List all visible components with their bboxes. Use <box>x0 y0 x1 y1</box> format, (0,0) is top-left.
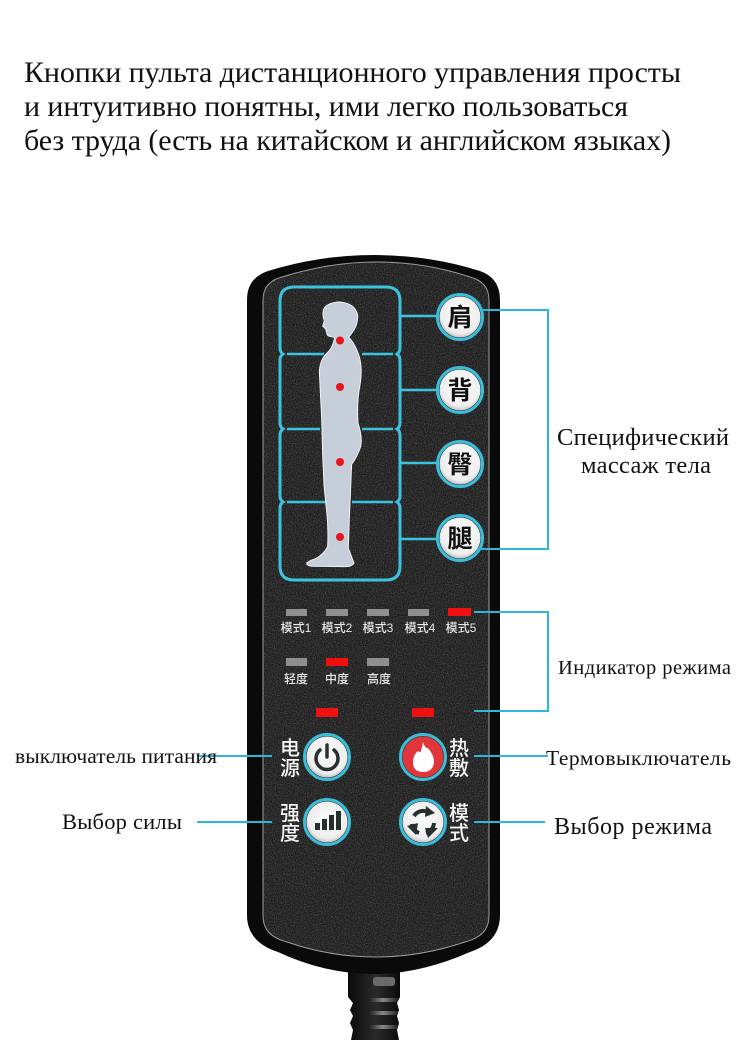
strength button <box>280 800 350 845</box>
button: shoulder <box>438 294 482 340</box>
heat button: 热 <box>449 737 469 760</box>
mode indicators <box>281 608 477 635</box>
title: и интуитивно понятны, ими легко пользоваться <box>24 90 628 123</box>
callout: body zones bracket <box>477 310 729 549</box>
strength button: 强 <box>280 803 300 825</box>
power button: 电 <box>280 737 300 760</box>
power and heat indicators <box>316 708 434 717</box>
callout: heat switch: Термовыключатель <box>546 746 731 770</box>
power button: 源 <box>280 757 300 780</box>
button: hips <box>438 442 482 486</box>
power button <box>280 734 350 780</box>
button: shoulder: 肩 <box>447 304 473 332</box>
heat button <box>400 734 469 780</box>
strength indicators: 中度 <box>325 671 349 686</box>
remote control body <box>247 255 500 974</box>
cable <box>348 965 400 1040</box>
button: back: 背 <box>447 377 473 405</box>
callout: mode indicator bracket: Индикатор режима <box>558 657 731 679</box>
mode indicators: 模式2 <box>322 620 353 635</box>
callout: strength selection: Выбор силы <box>62 809 182 834</box>
callout: power switch: выключатель питания <box>15 744 217 768</box>
callout: mode indicator bracket <box>474 612 731 711</box>
mode indicators: 模式4 <box>405 620 436 635</box>
strength button: 度 <box>280 822 300 845</box>
callout: body zones bracket: Специфический <box>557 424 729 451</box>
heat button: 敷 <box>449 757 469 780</box>
human body silhouette <box>307 302 361 567</box>
mode indicators: 模式1 <box>281 620 312 635</box>
mode button: 式 <box>449 822 469 845</box>
mode button: 模 <box>449 802 469 825</box>
strength indicators: 轻度 <box>284 671 308 686</box>
strength indicators: 高度 <box>367 671 391 686</box>
button: hips: 臀 <box>447 451 473 479</box>
title: Кнопки пульта дистанционного управления просты <box>24 56 681 89</box>
callout: mode selection: Выбор режима <box>554 814 712 840</box>
button: back <box>438 368 482 412</box>
mode indicators: 模式3 <box>363 620 394 635</box>
mode button <box>400 800 469 845</box>
mode indicators: 模式5 <box>446 620 477 635</box>
zone frame <box>280 287 437 580</box>
title: без труда (есть на китайском и английском языках) <box>24 124 671 157</box>
strength indicators <box>284 658 391 686</box>
title <box>24 56 681 157</box>
callout: body zones bracket: массаж тела <box>581 452 711 479</box>
button: legs: 腿 <box>447 525 473 553</box>
button: legs <box>438 516 482 560</box>
